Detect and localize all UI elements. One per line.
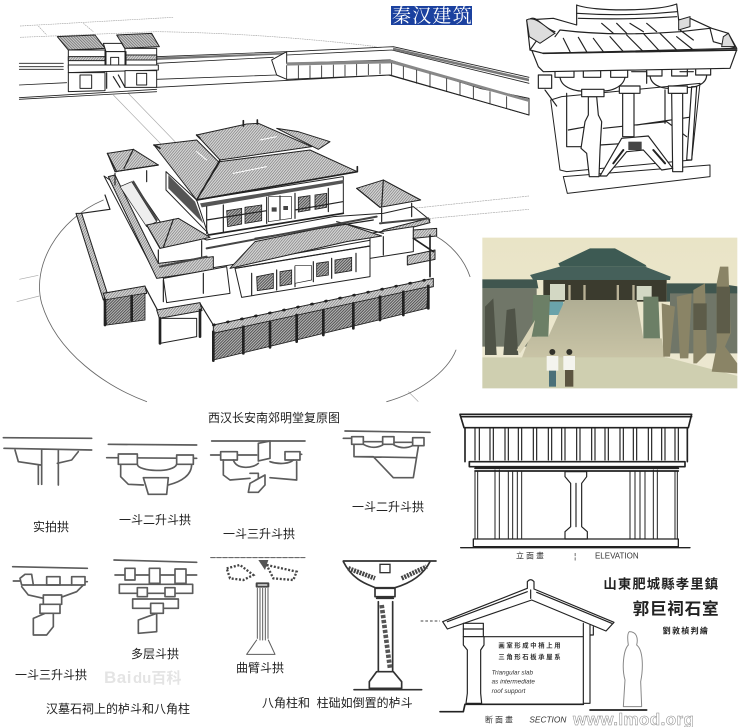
drawing captions: ¦: [574, 551, 576, 561]
caption: 曲臂斗拱: 曲臂斗拱: [236, 661, 284, 675]
drawing captions: [485, 550, 639, 725]
interior walls: [551, 83, 700, 172]
front hall: [230, 220, 383, 297]
far roof: [277, 128, 330, 149]
caption: 一斗三升斗拱 lower: 一斗三升斗拱: [15, 668, 87, 682]
outer railing bands: [76, 195, 437, 333]
watermark: Baidu: du百科: [133, 669, 181, 687]
main hall roofs: [154, 120, 357, 200]
stairs: [522, 300, 665, 358]
caption: 实拍拱: 实拍拱: [33, 519, 69, 534]
drawing captions: SECTION: [529, 715, 567, 725]
caption: 一斗三升斗拱: 一斗三升斗拱: [223, 527, 295, 541]
heading: 山東肥城縣孝里鎮 郭巨祠石室: 山東肥城縣孝里鎮: [603, 575, 719, 591]
base: [563, 165, 710, 193]
drawing captions: ELEVATION: [595, 551, 639, 560]
section annotations: [492, 641, 562, 695]
caption: 八角柱和柱础: 八角柱和 柱础如倒置的栌斗: [262, 695, 413, 710]
drawing captions: 断面畫: [485, 714, 515, 724]
caption: 汉墓石祠: 汉墓石祠上的栌斗和八角柱: [46, 701, 190, 716]
bracket: 实拍拱: [3, 438, 92, 485]
sky: [482, 238, 738, 376]
side wings: [480, 279, 740, 302]
brackets group: [3, 431, 440, 690]
visitors: [547, 356, 575, 371]
right stair brackets: [407, 228, 437, 265]
main hall facade: [197, 177, 343, 235]
pavilion centre: [147, 218, 210, 267]
section annotations: as intermediate: [492, 679, 535, 686]
caption: 一斗二升斗拱 right: 一斗二升斗拱: [352, 500, 424, 514]
brackets: [538, 67, 711, 106]
heading: 山東肥城縣孝里鎮 郭巨祠石室: 郭巨祠石室: [633, 598, 719, 618]
section annotations: 三角形石板承屋系: [498, 652, 562, 661]
caption: 多层斗拱: 多层斗拱: [131, 647, 179, 661]
lower colonnades: [104, 286, 428, 361]
title: 秦汉建筑: [392, 5, 473, 27]
section annotations: 画室形成中梢上用: [498, 641, 562, 650]
watermark: Baidu: Bai: [104, 668, 132, 687]
right statues: [662, 267, 737, 373]
rear balustrade: [133, 182, 377, 248]
photo: reconstructed Han hall with stairs and statues: [480, 235, 740, 392]
elevation drawing: [460, 414, 692, 548]
columns: [581, 87, 697, 177]
ladder: [600, 136, 673, 176]
illustration: Mingtang reconstruction aerial view: [17, 17, 529, 402]
bracket: 多层斗拱: [114, 560, 197, 633]
heading: 山東肥城縣孝里鎮 郭巨祠石室: [603, 575, 719, 636]
enclosure wall: [19, 47, 529, 115]
bracket: 一斗二升: [107, 444, 197, 494]
bracket: 一斗三升 second row: [13, 567, 87, 635]
section annotations: Triangular slab: [492, 669, 534, 676]
watermark: Baidu: [104, 668, 181, 687]
faint site lines: [17, 17, 529, 402]
captions: [15, 410, 424, 716]
drawing captions: 立面畫: [516, 550, 546, 560]
hall facade: [543, 280, 667, 302]
heading: 山東肥城縣孝里鎮 郭巨祠石室: 劉敦楨判繪: [663, 626, 709, 636]
terrace platforms: [77, 173, 435, 325]
pavilion left: [107, 149, 158, 185]
corner gallery on wall: [272, 52, 529, 115]
elevation and section drawings: [440, 414, 719, 725]
bracket: 八角柱: [343, 561, 440, 690]
gate towers: [57, 33, 159, 92]
lanterns: [532, 295, 660, 338]
roof: [527, 4, 737, 53]
bracket: 一斗三升: [211, 441, 305, 492]
circular site outline: [39, 200, 470, 402]
section annotations: roof support: [492, 688, 526, 695]
section drawing: [440, 580, 647, 712]
caption: 一斗二升斗拱: 一斗二升斗拱: [119, 513, 191, 527]
beam: [532, 50, 737, 72]
caption: 西汉长安南郊明堂复原图: 西汉长安南郊明堂复原图: [208, 410, 340, 425]
hall roofs: [558, 248, 647, 267]
pavilion right: [357, 180, 428, 223]
bracket: 一斗二升 side: [343, 431, 430, 478]
left statues: [485, 298, 518, 355]
bracket: 曲臂斗拱: [211, 558, 305, 654]
side wall main hall: [166, 172, 208, 233]
illustration: pottery model of a Han building: [527, 4, 737, 193]
ground: [482, 358, 738, 388]
